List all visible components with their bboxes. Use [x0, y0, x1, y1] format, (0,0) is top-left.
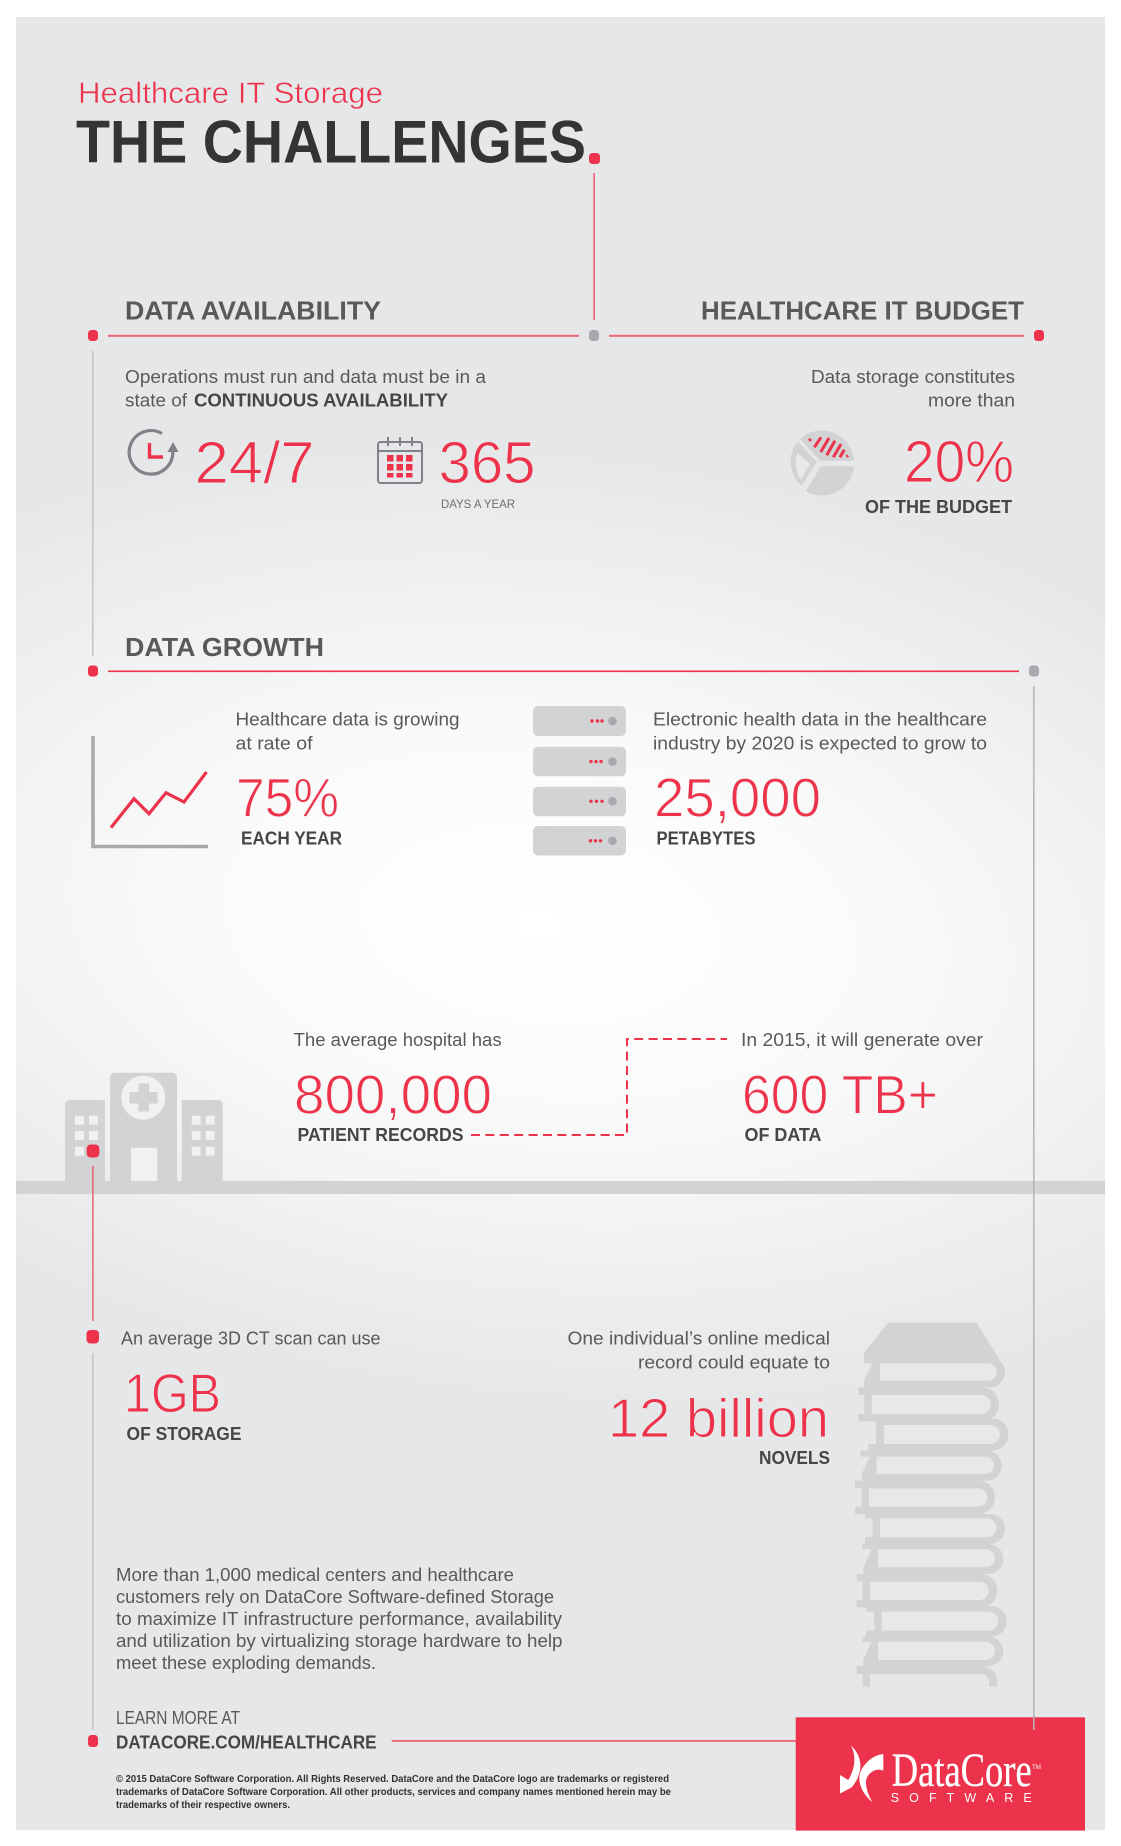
marker: CT red dot	[86, 1330, 99, 1344]
stat: 1GB of storage: 1GB	[124, 1362, 221, 1424]
floor band	[16, 1181, 1105, 1194]
text: budget intro	[811, 367, 1015, 410]
stat: 365 days a year: 365	[438, 430, 536, 496]
connector: dashed line	[471, 1039, 727, 1135]
call to action	[88, 1708, 796, 1753]
connector: lower left gray line	[92, 1353, 94, 1730]
stat: 600 TB+ of data: OF DATA	[744, 1125, 822, 1145]
stat: 800,000 patient records: 800,000	[294, 1064, 492, 1126]
rule: data growth	[88, 666, 1039, 676]
text: datacore paragraph: and utilization by virtualizing storage hardware to help	[116, 1631, 562, 1651]
title: Healthcare IT Storage	[78, 77, 383, 110]
panel: data availability	[88, 296, 599, 511]
stat: 12 billion novels: NOVELS	[759, 1448, 830, 1468]
copyright: trademarks of DataCore Software Corporation. All other products, services and company names mentioned herein may be	[116, 1786, 671, 1798]
title: THE CHALLENGES	[76, 108, 586, 176]
stat: 20% of the budget	[865, 429, 1014, 517]
panel: CT scan	[86, 1328, 380, 1444]
text: electronic health data: Electronic health data in the healthcare	[653, 710, 987, 730]
text: growth rate: Healthcare data is growing	[236, 710, 460, 730]
logo panel	[796, 1717, 1085, 1831]
text: datacore paragraph: to maximize IT infrastructure performance, availability	[116, 1609, 562, 1629]
rule: data availability	[88, 330, 599, 341]
copyright: trademarks of their respective owners.	[116, 1799, 290, 1811]
panel: healthcare IT budget	[609, 296, 1044, 517]
connector: title to sections	[594, 173, 595, 320]
text: continuous availability: Operations must run and data must be in a	[125, 367, 487, 387]
text: 2015 generate: In 2015, it will generate over	[741, 1030, 983, 1050]
icon: stack of books	[855, 1323, 1008, 1687]
stat: 75% each year: EACH YEAR	[241, 829, 342, 849]
text: electronic health data	[653, 710, 987, 754]
stat: 12 billion novels: 12 billion	[608, 1387, 829, 1449]
logo wordmark: DataCore	[892, 1744, 1032, 1797]
stat: 1GB of storage: OF STORAGE	[126, 1424, 242, 1444]
text: budget intro: more than	[928, 390, 1015, 410]
text: ct scan: An average 3D CT scan can use	[121, 1328, 380, 1348]
icon: clock	[129, 431, 178, 474]
copyright: © 2015 DataCore Software Corporation. All Rights Reserved. DataCore and the DataCore logo are trademarks or registered	[116, 1773, 669, 1785]
text: datacore paragraph: meet these exploding demands.	[116, 1653, 376, 1673]
panel: hospital stats	[294, 1030, 983, 1145]
stat: 800,000 patient records: PATIENT RECORDS	[298, 1125, 464, 1145]
panel: data growth	[88, 632, 1039, 856]
connector: red line below hospital	[92, 1166, 94, 1321]
connector: left gray line	[92, 351, 94, 656]
icon: hospital	[65, 1073, 223, 1181]
text: electronic health data: industry by 2020 is expected to grow to	[653, 734, 987, 754]
call to action: LEARN MORE AT	[116, 1708, 240, 1728]
stat: 20% of the budget: 20%	[904, 429, 1014, 495]
icon: line chart	[93, 736, 208, 846]
text: datacore paragraph: customers rely on DataCore Software-defined Storage	[116, 1587, 554, 1607]
text: growth rate	[236, 710, 460, 754]
icon: pie chart	[791, 431, 854, 495]
stat: 25,000 petabytes: 25,000	[654, 766, 821, 828]
logo wordmark: SOFTWARE	[891, 1791, 1032, 1805]
panel: novels	[568, 1323, 1008, 1687]
heading: healthcare IT budget: HEALTHCARE IT BUDGET	[701, 296, 1024, 326]
stat: 600 TB+ of data: 600 TB+	[742, 1064, 938, 1126]
icon: server stack	[533, 706, 626, 856]
stat: 365 days a year: DAYS A YEAR	[441, 497, 515, 511]
text: budget intro: Data storage constitutes	[811, 367, 1015, 387]
text: online medical record: record could equate to	[638, 1352, 830, 1372]
stat: 20% of the budget: OF THE BUDGET	[865, 497, 1012, 517]
logo wordmark: TM	[1032, 1765, 1041, 1771]
icon: calendar	[378, 437, 422, 483]
text: datacore paragraph	[116, 1565, 562, 1673]
text: continuous availability: state of	[125, 390, 188, 410]
text: growth rate: at rate of	[236, 734, 314, 754]
stat: 75% each year: 75%	[236, 766, 339, 828]
text: online medical record	[568, 1328, 830, 1372]
text: continuous availability	[125, 367, 487, 410]
text: average hospital: The average hospital has	[294, 1030, 502, 1050]
icon: datacore swoosh	[840, 1746, 883, 1802]
text: continuous availability: CONTINUOUS AVAILABILITY	[194, 390, 448, 410]
text: online medical record: One individual’s online medical	[568, 1328, 830, 1348]
rule: budget	[609, 330, 1044, 341]
heading: data growth: DATA GROWTH	[125, 632, 324, 662]
connector: right gray line	[1033, 686, 1035, 1730]
copyright	[116, 1773, 671, 1811]
stat: 24/7: 24/7	[194, 430, 314, 496]
title	[76, 77, 600, 176]
heading: data availability: DATA AVAILABILITY	[125, 296, 381, 326]
text: datacore paragraph: More than 1,000 medical centers and healthcare	[116, 1565, 514, 1585]
stat: 25,000 petabytes: PETABYTES	[656, 829, 756, 849]
marker: hospital red dot	[87, 1144, 99, 1158]
call to action: DATACORE.COM/HEALTHCARE	[116, 1733, 377, 1753]
